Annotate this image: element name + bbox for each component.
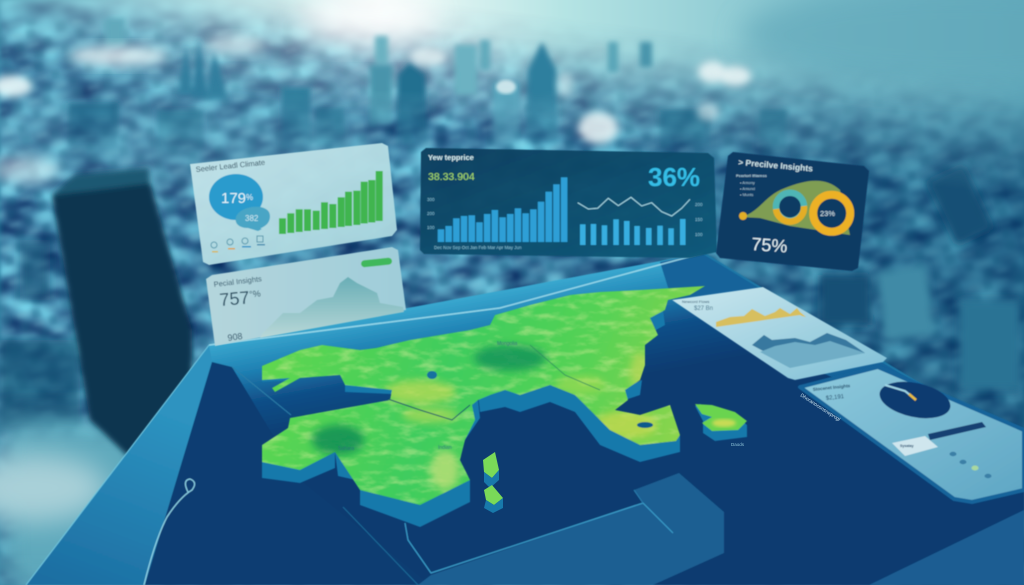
legend: • Amund [740, 186, 755, 191]
speech bubble metric: 179 [221, 190, 246, 207]
extruded sides [262, 310, 680, 527]
card title: Seeler Leadl Climate [195, 158, 265, 174]
axis labels: 100 [427, 225, 435, 230]
panel: predictive insights card: 908 [227, 331, 243, 343]
legend: • Munts [740, 192, 753, 197]
axis labels: 200 [427, 211, 435, 216]
terrain surface [261, 286, 705, 506]
region labels: Indian [438, 445, 452, 451]
card title: Yew tepprice [428, 153, 474, 162]
raised block outline on table [418, 473, 724, 585]
inlet [637, 422, 653, 428]
gold bar area [716, 308, 806, 327]
blue bar chart [438, 177, 567, 242]
card label: Stocenet Insights [813, 383, 851, 392]
border lines [388, 399, 470, 420]
card label: Newcord Flows [682, 299, 709, 304]
region labels [338, 341, 518, 452]
small blue bars [580, 219, 686, 245]
donut chart [739, 181, 850, 235]
big metric: 757 [219, 287, 250, 310]
big metric: °% [249, 288, 261, 299]
big percentage: 75% [751, 234, 788, 257]
speech bubble metric: 382 [245, 214, 259, 223]
panel: yearly response chart card [420, 148, 717, 258]
speech bubble metric: % [246, 193, 253, 202]
panel: sector lead climate card [190, 143, 397, 265]
panel: glass dashboard with table surface [26, 253, 1024, 585]
callout label: Sysatay [900, 444, 914, 448]
axis labels: 300 [427, 197, 435, 202]
card title: > Precilve Insights [738, 157, 814, 174]
donut chart: 23% [820, 209, 835, 218]
region labels: Sahara [338, 446, 354, 452]
area chart [260, 277, 404, 338]
legend: • Amony [740, 180, 755, 185]
island: small south [484, 485, 503, 513]
caption along table edge: Dhoranoconsneprogl [799, 393, 841, 423]
progress bar [928, 422, 986, 440]
legend [736, 173, 768, 197]
dark foreground skyscraper [52, 168, 192, 458]
panel: pie chart card on table [800, 367, 1024, 502]
callout label [892, 436, 938, 456]
panel: predictive insights card [206, 247, 406, 346]
green bar chart [279, 171, 383, 234]
small status icons [211, 236, 265, 252]
headline number: 38.33.904 [428, 171, 475, 183]
legend: Pearlorl Ifliamss [736, 173, 768, 178]
blue mountain area [752, 333, 865, 360]
percentage: 36% [648, 162, 700, 192]
caption: island label: Daods [731, 442, 745, 447]
panel: tilted trend card on table: $27 Bn [694, 306, 713, 312]
panel: tilted trend card on table [672, 287, 887, 380]
card title: Pecial Insights [213, 274, 262, 289]
axis labels: 100 [695, 232, 703, 237]
panel: predictive insights donut card [716, 152, 869, 271]
pie chart [876, 376, 954, 424]
region labels: Mongolia [497, 341, 518, 347]
trend line [578, 197, 690, 216]
map: 3D terrain landmass [250, 280, 720, 527]
panel: pie chart card on table: $2,191 [826, 394, 845, 402]
island: small north [483, 452, 499, 488]
legend [950, 452, 992, 478]
axis labels [427, 197, 703, 250]
green pill [361, 257, 392, 268]
island: east group [695, 404, 747, 441]
axis labels: 200 [695, 202, 703, 207]
inland lake [427, 371, 437, 379]
axis labels: 150 [695, 217, 703, 222]
axis labels: Dec Nov Sep Oct Jan Feb Mar Apr May Jun [434, 245, 522, 250]
speech bubble metric [209, 174, 270, 231]
